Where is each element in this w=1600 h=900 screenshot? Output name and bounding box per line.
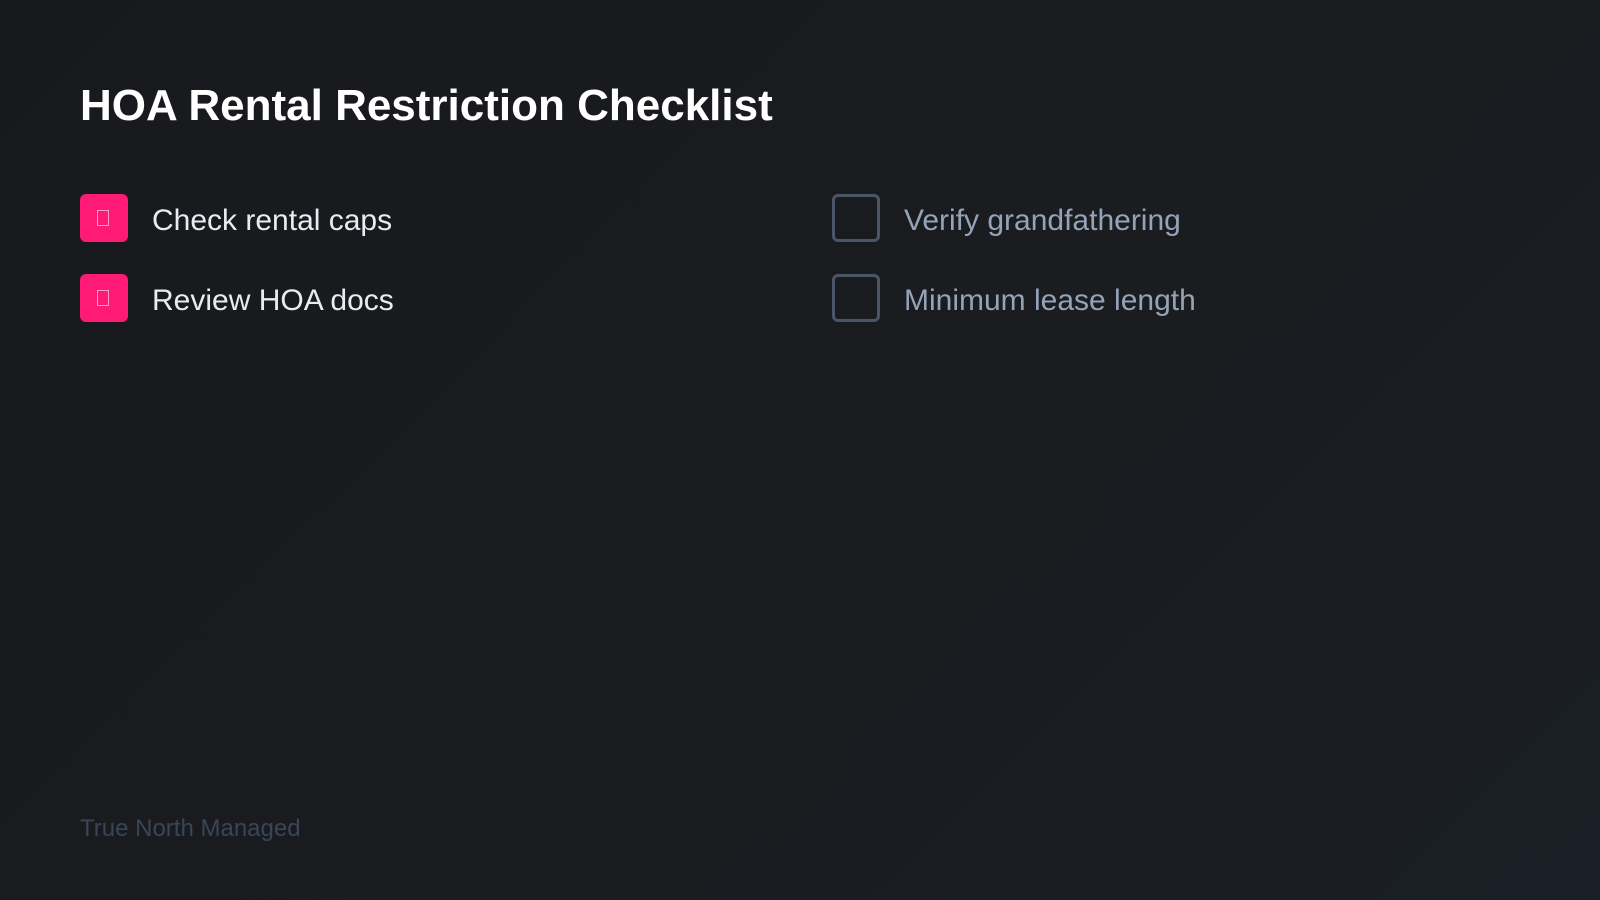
checklist item: Check rental caps: [80, 194, 392, 242]
footer: True North Managed: [80, 815, 301, 842]
icon: checked box: [80, 274, 128, 322]
checklist item: Check rental caps: Check rental caps: [152, 204, 392, 237]
icon: unchecked box: [832, 194, 880, 242]
checklist item: Review HOA docs: [80, 274, 394, 322]
checklist item: Minimum lease length: [832, 274, 1196, 322]
icon: unchecked box: [832, 274, 880, 322]
checklist item: Review HOA docs: Review HOA docs: [152, 284, 394, 317]
checklist item: Minimum lease length: Minimum lease length: [904, 284, 1196, 317]
checklist item: Verify grandfathering: [832, 194, 1181, 242]
title: HOA Rental Restriction Checklist: [80, 81, 773, 130]
checklist item: Verify grandfathering: Verify grandfathering: [904, 204, 1181, 237]
icon: checked box: [80, 194, 128, 242]
